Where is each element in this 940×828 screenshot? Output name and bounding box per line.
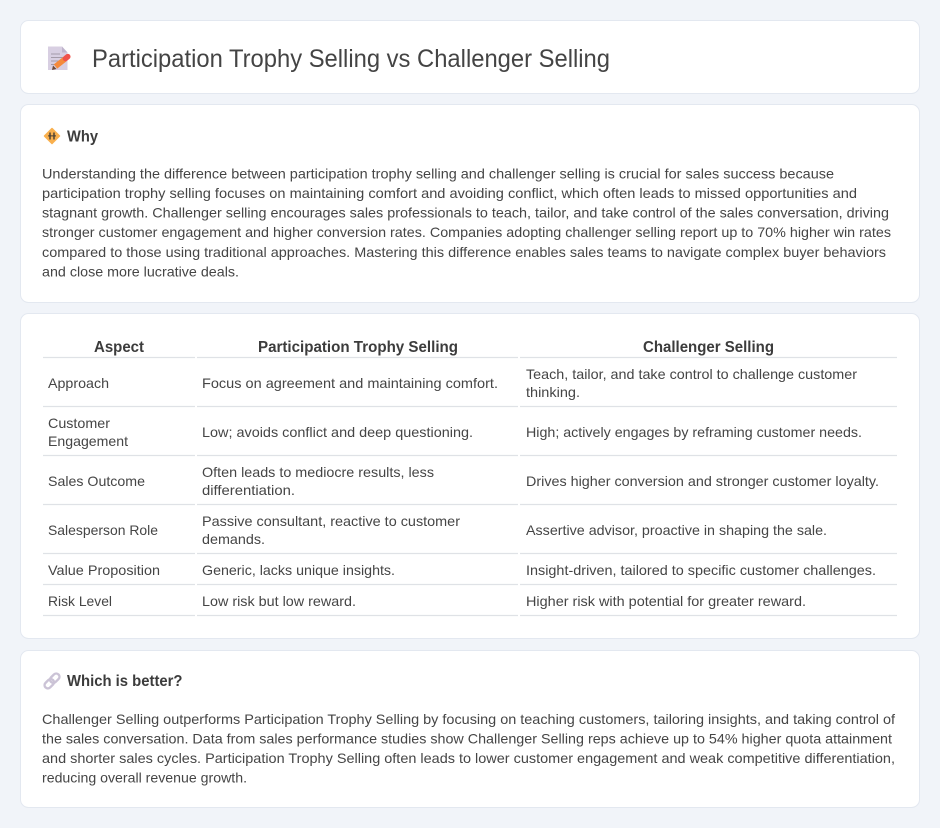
text block: verdict paragraph: Challenger Selling outperforms Participation Trophy Selling by focusing on teaching customers, tailoring insights, and taking control of bbox=[42, 711, 895, 727]
heading: which is better: Which is better? bbox=[67, 673, 182, 690]
row: customer engagement: High; actively engages by reframing customer needs. bbox=[526, 424, 862, 440]
row: customer engagement: Low; avoids conflict and deep questioning. bbox=[202, 424, 473, 440]
icon: memo with pencil bbox=[48, 46, 68, 70]
icon: orange diamond sign bbox=[44, 128, 60, 144]
panel: title header bbox=[20, 20, 920, 94]
panel: which is better bbox=[20, 650, 920, 808]
row: salesperson role: Salesperson Role bbox=[48, 522, 158, 538]
table header row bbox=[94, 339, 774, 356]
text block: why paragraph: participation trophy selling focuses on maintaining comfort and avoiding conflict, which often leads to missed opportunities and bbox=[42, 185, 857, 201]
panel: why bbox=[20, 104, 920, 302]
text block: why paragraph: stronger customer engagement and higher conversion rates. Companies adopting challenger selling report up to 70% higher win rates bbox=[42, 224, 891, 240]
row: salesperson role: Assertive advisor, proactive in shaping the sale. bbox=[526, 522, 827, 538]
text block: why paragraph: and close more lucrative deals. bbox=[42, 263, 239, 279]
row: value proposition bbox=[48, 562, 876, 578]
row: customer engagement bbox=[48, 415, 862, 449]
row: salesperson role: demands. bbox=[202, 531, 265, 547]
row: value proposition: Value Proposition bbox=[48, 562, 160, 578]
row: salesperson role: Passive consultant, reactive to customer bbox=[202, 513, 460, 529]
row: customer engagement: Customer bbox=[48, 415, 110, 431]
row: value proposition: Generic, lacks unique insights. bbox=[202, 562, 395, 578]
text block: why paragraph: Understanding the difference between participation trophy selling and challenger selling is crucial for sales success because bbox=[42, 166, 834, 182]
row: sales outcome: Sales Outcome bbox=[48, 473, 145, 489]
text block: why paragraph: compared to those using traditional approaches. Mastering this difference enables sales teams to navigate complex buyer behaviors bbox=[42, 244, 886, 260]
row: sales outcome: differentiation. bbox=[202, 482, 295, 498]
row: risk level: Low risk but low reward. bbox=[202, 593, 356, 609]
row: risk level bbox=[48, 593, 806, 609]
text block: verdict paragraph: the sales conversation. Data from sales performance studies show Challenger Selling reps achieve up to 54% higher quota attainment bbox=[42, 730, 892, 746]
row: sales outcome bbox=[48, 464, 879, 498]
row: approach: Focus on agreement and maintaining comfort. bbox=[202, 375, 498, 391]
table header row: Aspect bbox=[94, 339, 145, 356]
text block: verdict paragraph bbox=[42, 711, 895, 786]
panel: comparison table bbox=[20, 314, 920, 638]
row: salesperson role bbox=[48, 513, 827, 547]
icon: link bbox=[43, 672, 61, 690]
row: sales outcome: Often leads to mediocre results, less bbox=[202, 464, 434, 480]
row: risk level: Higher risk with potential for greater reward. bbox=[526, 593, 806, 609]
row: risk level: Risk Level bbox=[48, 593, 112, 609]
text block: verdict paragraph: and shorter sales cycles. Participation Trophy Selling often leads to lower customer engagement and weak competitive differentiation, bbox=[42, 750, 895, 766]
text block: why paragraph bbox=[42, 166, 891, 279]
text block: verdict paragraph: reducing overall revenue growth. bbox=[42, 770, 247, 786]
heading: why: Why bbox=[67, 128, 98, 146]
table header row: Challenger Selling bbox=[643, 339, 774, 356]
row: approach: Teach, tailor, and take control to challenge customer bbox=[526, 366, 857, 382]
row: value proposition: Insight-driven, tailored to specific customer challenges. bbox=[526, 562, 876, 578]
row: approach: thinking. bbox=[526, 384, 580, 400]
row: approach: Approach bbox=[48, 375, 109, 391]
row: sales outcome: Drives higher conversion and stronger customer loyalty. bbox=[526, 473, 879, 489]
text block: why paragraph: stagnant growth. Challenger selling encourages sales professionals to teach, tailor, and take control of the sales conversation, driving bbox=[42, 205, 889, 221]
row: approach bbox=[48, 366, 857, 400]
row: customer engagement: Engagement bbox=[48, 433, 128, 449]
title: Participation Trophy Selling vs Challenger Selling bbox=[92, 45, 610, 73]
table header row: Participation Trophy Selling bbox=[258, 339, 458, 356]
